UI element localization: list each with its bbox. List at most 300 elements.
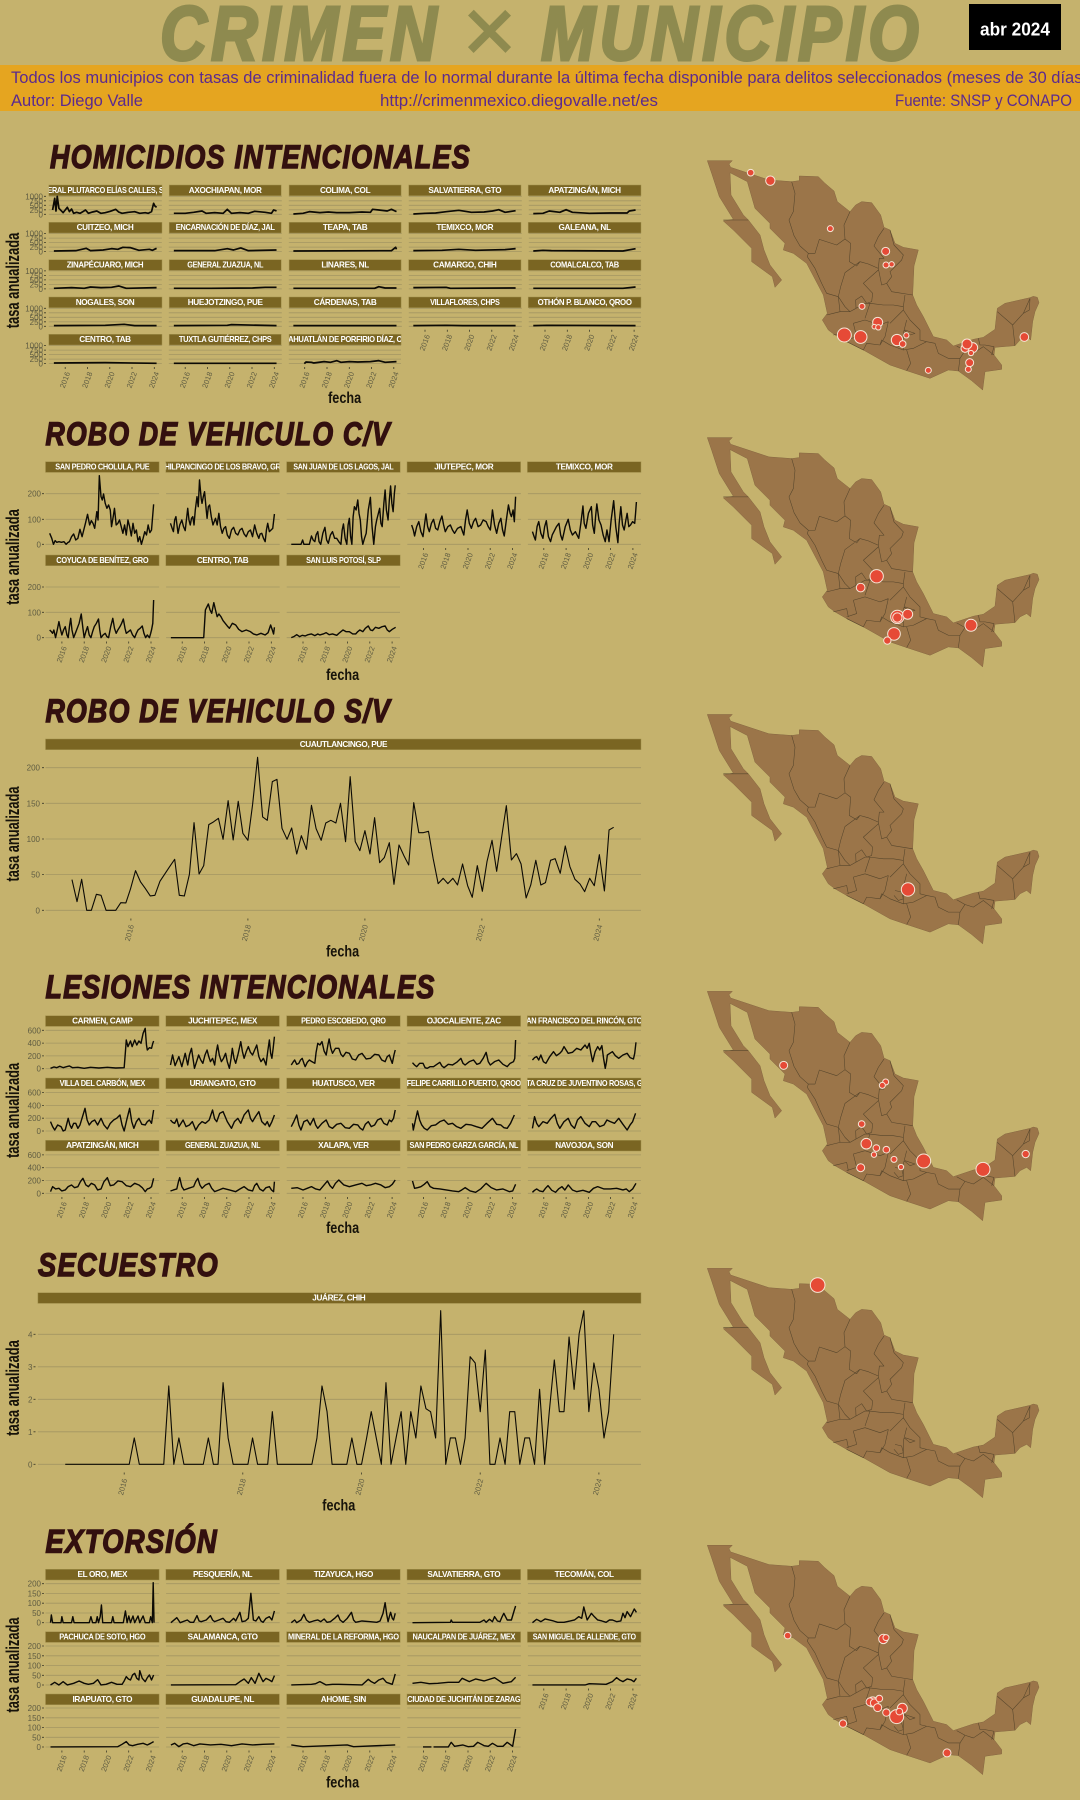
panel: Cuautlancingo [46, 739, 641, 910]
y axis row 2: 100 [28, 1662, 42, 1670]
y axis row 1: 400 [28, 1039, 42, 1048]
panel: Uriangato [166, 1078, 279, 1130]
panel: Temixco [527, 462, 641, 543]
x axis col 1: 2024 [144, 645, 158, 664]
x axis col 2 [178, 367, 281, 389]
section: secuestro [2, 1247, 641, 1515]
panel: Felipe Carrillo Puerto [407, 1078, 522, 1130]
x axis col 1 [55, 1197, 158, 1219]
panel: General Zuazua [166, 1140, 279, 1192]
y axis row 3 [25, 267, 46, 294]
x axis col 4: 2020 [461, 552, 475, 570]
y axis row 3: 100 [28, 1724, 42, 1732]
section: robo de vehiculo s/v [2, 693, 641, 961]
x axis col 2: 2016 [178, 371, 192, 389]
x axis col 3: 2020 [340, 1201, 354, 1219]
x axis col 4: 2022 [485, 333, 499, 352]
panel: Axochiapan [169, 185, 281, 213]
x axis: 2024 [591, 1478, 604, 1496]
x axis col 1 [55, 1750, 158, 1773]
panel: San Miguel de Allende [527, 1632, 641, 1685]
y axis row 2: 0 [37, 1681, 42, 1690]
panel: Colima [289, 185, 401, 214]
panel: Juchitepec [166, 1016, 279, 1068]
y axis row 3: 750 [30, 271, 44, 280]
x axis col 1: 2016 [55, 1754, 69, 1773]
panel: Cuautlancingo: CUAUTLANCINGO, PUE [300, 740, 388, 749]
x axis col 1: 2020 [99, 645, 113, 664]
x axis col 1: 2018 [77, 1754, 91, 1773]
x axis col 2: 2024 [267, 371, 281, 389]
x axis col 2: 2018 [197, 1201, 211, 1219]
y axis title: tasa anualizada [2, 1340, 23, 1436]
y axis row 3: 0 [37, 1743, 42, 1752]
y axis row 3: 500 [30, 276, 44, 285]
panel: Centro: CENTRO, TAB [197, 556, 249, 565]
x axis col 2: 2020 [220, 1201, 234, 1219]
x axis col 4: 2024 [505, 1754, 519, 1773]
x axis col 5 [537, 1688, 640, 1711]
section: extorsión [2, 1524, 641, 1792]
panel: Pedro Escobedo [287, 1016, 400, 1067]
panel: Guadalupe [166, 1694, 279, 1747]
date badge: abr 2024 [980, 20, 1050, 40]
y axis row 2: 50 [32, 1671, 42, 1680]
x axis col 1 [55, 642, 158, 664]
x axis col 1: 2022 [121, 645, 136, 664]
x axis col 2: 2022 [242, 1201, 256, 1219]
panel: Apatzingán: APATZINGÁN, MICH [66, 1140, 139, 1150]
y axis row 1: 0 [37, 1619, 42, 1628]
y axis row 1: 200 [28, 490, 42, 499]
y axis row 1: 100 [28, 1599, 42, 1608]
y axis row 3: 0 [39, 285, 44, 294]
y axis: 150 [27, 799, 41, 808]
x axis col 1: 2020 [99, 1201, 113, 1219]
panel: Nogales [49, 297, 162, 326]
heading: ROBO DE VEHICULO S/V [46, 693, 392, 729]
x axis col 5: 2024 [627, 333, 641, 352]
x axis title: fecha [328, 390, 361, 407]
x axis: 2016 [116, 1478, 129, 1496]
y axis row 2: 500 [30, 239, 44, 248]
y axis row 2: 0 [37, 634, 42, 643]
y axis row 1: 50 [32, 1609, 42, 1618]
y axis row 3 [28, 1151, 44, 1198]
panel: Pesquería: PESQUERÍA, NL [193, 1569, 253, 1579]
y axis: 200 [27, 764, 41, 773]
panel: General Zuazua [169, 260, 281, 288]
x axis col 4: 2016 [418, 333, 432, 352]
panel: Temixco: TEMIXCO, MOR [556, 463, 613, 472]
panel: Jiutepec: JIUTEPEC, MOR [434, 463, 494, 472]
x axis col 2: 2016 [175, 1201, 189, 1219]
y axis row 3: 600 [28, 1151, 42, 1160]
panel: Coyuca de Benítez [46, 555, 159, 638]
y axis row 1 [28, 490, 44, 549]
x axis col 3 [297, 367, 401, 389]
panel: Guadalupe: GUADALUPE, NL [191, 1695, 254, 1704]
x axis col 4: 2024 [507, 333, 521, 352]
y axis row 4: 250 [30, 318, 44, 327]
panel: Pachuca de Soto: PACHUCA DE SOTO, HGO [59, 1633, 146, 1642]
panel: San Francisco del Rincón [526, 1015, 643, 1068]
x axis col 2 [175, 1750, 278, 1773]
panel: Apatzingán [528, 185, 641, 214]
x axis col 5: 2024 [626, 552, 640, 570]
panel: Villaflores: VILLAFLORES, CHPS [430, 298, 500, 307]
y axis row 3: 250 [30, 280, 44, 289]
x axis col 3 [296, 642, 399, 664]
date badge [969, 4, 1061, 50]
y axis row 5: 1000 [25, 342, 44, 351]
panel: Ahuatlán de Porfirio Díaz [288, 334, 403, 364]
heading: EXTORSIÓN [46, 1524, 218, 1560]
x axis col 5: 2016 [537, 1692, 551, 1711]
x axis col 2: 2018 [200, 371, 214, 389]
y axis: 3 [28, 1363, 33, 1372]
x axis col 1: 2016 [58, 371, 72, 389]
map: extorsión [707, 1545, 1039, 1775]
panel: Apatzingán [46, 1140, 159, 1192]
x axis col 3: 2024 [385, 645, 399, 664]
y axis row 1: 0 [37, 540, 42, 549]
y axis row 3: 200 [28, 1177, 42, 1186]
x axis col 3: 2020 [340, 1754, 354, 1773]
y axis title: tasa anualizada [2, 1617, 23, 1712]
x axis col 5: 2018 [559, 552, 573, 570]
x axis col 4: 2018 [438, 1754, 453, 1773]
y axis: 50 [31, 871, 41, 880]
x axis col 3: 2018 [318, 1201, 332, 1219]
y axis row 2: 0 [37, 1127, 42, 1136]
panel: Axochiapan: AXOCHIAPAN, MOR [189, 186, 262, 195]
panel: Naucalpan de Juárez [407, 1632, 521, 1684]
url: http://crimenmexico.diegovalle.net/es [380, 91, 658, 110]
x axis col 2: 2016 [175, 645, 189, 664]
panel: Xalapa [287, 1140, 400, 1190]
panel: General Zuazua: GENERAL ZUAZUA, NL [185, 1141, 261, 1150]
y axis [27, 764, 44, 915]
x axis col 4: 2016 [416, 552, 430, 570]
panel: Huatusco [287, 1078, 400, 1130]
y axis row 2: 200 [28, 1114, 42, 1123]
x axis col 2: 2018 [197, 1754, 211, 1773]
x axis title: fecha [322, 1498, 355, 1515]
x axis col 5: 2022 [603, 1692, 617, 1711]
x axis col 3: 2016 [296, 645, 310, 664]
x axis col 1: 2022 [121, 1754, 136, 1773]
x axis col 2: 2016 [175, 1754, 189, 1773]
heading: SECUESTRO [38, 1247, 219, 1283]
x axis col 5: 2018 [559, 1692, 573, 1711]
y axis row 2 [25, 230, 46, 257]
y axis row 1: 100 [28, 515, 42, 524]
author: Autor: Diego Valle [11, 91, 143, 110]
y axis row 3: 1000 [25, 267, 44, 276]
x axis col 5: 2016 [537, 1201, 551, 1219]
x axis col 2: 2022 [242, 645, 256, 664]
y axis row 1 [28, 1580, 44, 1628]
x axis col 1: 2018 [77, 645, 91, 664]
panel: Huejotzingo: HUEJOTZINGO, PUE [188, 298, 264, 307]
panel: Comalcalco: COMALCALCO, TAB [550, 261, 619, 270]
y axis row 3 [28, 1704, 44, 1752]
x axis col 4 [418, 330, 521, 352]
x axis col 4: 2020 [461, 1201, 475, 1219]
x axis col 1: 2016 [55, 1201, 69, 1219]
x axis col 5: 2022 [603, 1201, 617, 1219]
panel: El Oro [46, 1569, 159, 1623]
x axis [123, 918, 604, 942]
y axis row 1: 500 [30, 201, 44, 210]
panel: Salamanca [166, 1632, 279, 1685]
panel: Huejotzingo [169, 297, 281, 326]
x axis col 1 [58, 367, 161, 389]
x axis col 2: 2024 [264, 1201, 278, 1219]
x axis [116, 1472, 604, 1496]
x axis col 2: 2022 [242, 1754, 256, 1773]
info band [0, 65, 1080, 111]
panel: Encarnación de Díaz [169, 221, 281, 251]
panel: Temixco [409, 222, 521, 251]
panel: Pesquería [166, 1569, 279, 1623]
y axis row 2: 0 [39, 248, 44, 257]
x axis col 4: 2022 [483, 552, 497, 570]
panel: San Luis Potosí: SAN LUIS POTOSÍ, SLP [306, 555, 381, 565]
panel: Centro [166, 555, 279, 638]
y axis row 1 [28, 1026, 44, 1074]
panel: San Pedro Cholula: SAN PEDRO CHOLULA, PUE [55, 463, 150, 472]
y axis row 1: 200 [28, 1052, 42, 1061]
panel: Ojocaliente: OJOCALIENTE, ZAC [427, 1017, 501, 1026]
y axis row 2: 200 [28, 1642, 42, 1651]
x axis col 5: 2022 [605, 333, 619, 352]
x axis col 2: 2020 [220, 1754, 234, 1773]
x axis col 5: 2020 [581, 1201, 595, 1219]
x axis col 3: 2020 [342, 371, 356, 389]
y axis: 2 [28, 1395, 33, 1404]
x axis col 5: 2024 [626, 1692, 640, 1711]
x axis title: fecha [326, 1775, 359, 1792]
panel: Naucalpan de Juárez: NAUCALPAN DE JUÁREZ, MEX [412, 1632, 516, 1642]
x axis col 1: 2020 [103, 371, 117, 389]
y axis row 5: 500 [30, 351, 44, 360]
panel: General Plutarco Elías Calles [47, 185, 164, 213]
x axis: 2018 [240, 924, 253, 942]
panel: Coyuca de Benítez: COYUCA DE BENÍTEZ, GRO [56, 555, 149, 565]
y axis row 5: 250 [30, 355, 44, 364]
y axis row 2: 250 [30, 243, 44, 252]
x axis col 4: 2020 [462, 333, 476, 352]
map: secuestro [707, 1268, 1039, 1498]
y axis row 1: 1000 [25, 192, 44, 201]
panel: Juárez [38, 1293, 641, 1464]
panel: Navojoa: NAVOJOA, SON [555, 1141, 614, 1150]
x axis col 1: 2018 [80, 371, 94, 389]
heading: HOMICIDIOS INTENCIONALES [50, 139, 471, 175]
x axis title: fecha [326, 667, 359, 684]
panel: Galeana [528, 222, 641, 251]
panel: Othón P. Blanco: OTHÓN P. BLANCO, QROO [538, 296, 633, 307]
y axis title: tasa anualizada [2, 232, 23, 328]
panel: Mineral de la Reforma: MINERAL DE LA REFORMA, HGO [288, 1633, 400, 1642]
x axis col 5: 2016 [538, 333, 552, 352]
x axis col 1: 2022 [121, 1201, 136, 1219]
x axis col 2: 2024 [264, 1754, 278, 1773]
panel: San Pedro Garza García [407, 1140, 521, 1192]
y axis row 4: 750 [30, 309, 44, 318]
panel: Cuitzeo: CUITZEO, MICH [77, 223, 134, 232]
panel: Cuitzeo [49, 222, 162, 251]
x axis col 4: 2018 [440, 333, 454, 352]
y axis row 1: 250 [30, 206, 44, 215]
x axis col 4: 2016 [416, 1754, 430, 1773]
panel: Irapuato: IRAPUATO, GTO [73, 1695, 133, 1704]
x axis col 3: 2018 [318, 645, 332, 664]
y axis title: tasa anualizada [2, 509, 23, 605]
x axis col 3: 2022 [363, 1201, 377, 1219]
x axis col 2 [175, 1197, 278, 1219]
x axis col 4: 2024 [505, 552, 519, 570]
x axis: 2020 [357, 924, 370, 942]
x axis title: fecha [326, 1220, 359, 1237]
y axis: 0 [28, 1460, 33, 1469]
panel: Camargo [409, 260, 521, 288]
x axis col 4: 2018 [438, 1201, 453, 1219]
map: lesiones intencionales [707, 991, 1039, 1221]
section: lesiones intencionales [2, 969, 643, 1237]
y axis row 3: 50 [32, 1733, 42, 1742]
x axis col 3: 2022 [364, 371, 378, 389]
panel: Xalapa: XALAPA, VER [318, 1141, 369, 1150]
map: homicidios [707, 161, 1039, 390]
panel: Othón P. Blanco [528, 296, 641, 326]
y axis row 1: 200 [28, 1580, 42, 1589]
panel: Carmen [46, 1016, 159, 1068]
y axis row 2: 600 [28, 1089, 42, 1098]
x axis col 5: 2016 [537, 552, 551, 570]
panel: Cárdenas [289, 297, 401, 326]
x axis col 2: 2022 [245, 371, 259, 389]
panel: San Luis Potosí [287, 555, 400, 638]
x axis col 1: 2024 [144, 1754, 158, 1773]
x axis col 3: 2020 [340, 645, 354, 664]
section: robo de vehiculo c/v [2, 416, 641, 684]
x axis col 3: 2016 [296, 1201, 310, 1219]
y axis row 5: 750 [30, 346, 44, 355]
y axis row 2: 200 [28, 583, 42, 592]
panel: Cárdenas: CÁRDENAS, TAB [314, 297, 377, 307]
section: homicidios intencionales [2, 139, 641, 407]
y axis row 4: 0 [39, 322, 44, 331]
panel: Salvatierra: SALVATIERRA, GTO [427, 1570, 501, 1579]
y axis [28, 1330, 36, 1469]
panel: El Oro: EL ORO, MEX [77, 1570, 128, 1579]
y axis: 0 [36, 906, 41, 915]
panel: San Juan de los Lagos: SAN JUAN DE LOS LAGOS, JAL [293, 463, 394, 472]
panel: Irapuato [46, 1694, 159, 1747]
y axis row 5 [25, 342, 46, 369]
panel: Teapa: TEAPA, TAB [323, 223, 368, 232]
y axis title: tasa anualizada [2, 1062, 23, 1158]
y axis row 2: 400 [28, 1101, 42, 1110]
panel: San Juan de los Lagos [287, 462, 400, 544]
panel: Temixco: TEMIXCO, MOR [436, 223, 494, 232]
y axis row 2 [28, 1089, 44, 1136]
x axis col 3: 2022 [363, 645, 377, 664]
x axis col 1: 2016 [55, 645, 69, 664]
x axis col 5: 2018 [559, 1201, 573, 1219]
y axis row 1: 150 [28, 1589, 42, 1598]
panel: Colima: COLIMA, COL [320, 186, 371, 195]
x axis: 2018 [235, 1478, 248, 1496]
x axis: 2020 [354, 1478, 367, 1496]
panel: Villa del Carbón [46, 1077, 159, 1131]
panel: Salvatierra: SALVATIERRA, GTO [428, 186, 502, 195]
panel: Carmen: CARMEN, CAMP [72, 1017, 133, 1026]
y axis row 5: 0 [39, 360, 44, 369]
x axis col 3: 2016 [296, 1754, 310, 1773]
y axis row 3: 200 [28, 1704, 42, 1713]
y axis row 1: 750 [30, 197, 44, 206]
panel: Villaflores [409, 297, 521, 326]
panel: Ahome [287, 1694, 400, 1747]
x axis col 4 [416, 1197, 519, 1219]
panel: Ciudad de Juchitán de Zaragoza [407, 1694, 521, 1747]
panel: Pedro Escobedo: PEDRO ESCOBEDO, QRO [301, 1017, 387, 1026]
panel: Jiutepec [407, 462, 521, 537]
line chart [65, 1311, 614, 1464]
panel: Pachuca de Soto [46, 1632, 159, 1685]
panel: Galeana: GALEANA, NL [559, 223, 611, 232]
y axis row 1 [25, 192, 46, 219]
panel: Juchitepec: JUCHITEPEC, MEX [188, 1017, 258, 1026]
x axis col 4 [416, 1750, 519, 1773]
panel: General Zuazua: GENERAL ZUAZUA, NL [187, 261, 263, 270]
x axis col 2 [175, 642, 278, 664]
panel: Zinapécuaro: ZINAPÉCUARO, MICH [67, 260, 144, 270]
y axis row 4: 500 [30, 313, 44, 322]
panel: Mineral de la Reforma [287, 1632, 400, 1685]
panel: Uriangato: URIANGATO, GTO [190, 1079, 257, 1088]
panel: Huatusco: HUATUSCO, VER [312, 1079, 375, 1088]
panel: Encarnación de Díaz: ENCARNACIÓN DE DÍAZ, JAL [176, 221, 275, 232]
title [160, 0, 923, 82]
panel: Tizayuca [287, 1569, 400, 1623]
y axis row 2: 100 [28, 608, 42, 617]
y axis row 4 [25, 304, 46, 331]
y axis row 1: 0 [37, 1065, 42, 1074]
panel: Ojocaliente [407, 1016, 521, 1068]
panel: Tuxtla Gutiérrez [169, 334, 281, 363]
x axis col 4: 2020 [461, 1754, 475, 1773]
x axis col 5: 2020 [581, 1692, 595, 1711]
y axis row 2: 750 [30, 234, 44, 243]
y axis title: tasa anualizada [2, 786, 23, 882]
x axis col 3: 2016 [297, 371, 312, 389]
x axis col 2: 2018 [197, 645, 211, 664]
panel: San Miguel de Allende: SAN MIGUEL DE ALLENDE, GTO [533, 1633, 637, 1642]
x axis col 3: 2024 [387, 371, 401, 389]
x axis col 1: 2024 [147, 371, 161, 389]
x axis: 2016 [123, 924, 136, 942]
x axis col 5: 2020 [582, 333, 596, 352]
x axis col 4: 2022 [483, 1201, 497, 1219]
y axis row 2: 1000 [25, 230, 44, 239]
x axis col 1: 2024 [144, 1201, 158, 1219]
panel: San Pedro Cholula [46, 462, 159, 544]
